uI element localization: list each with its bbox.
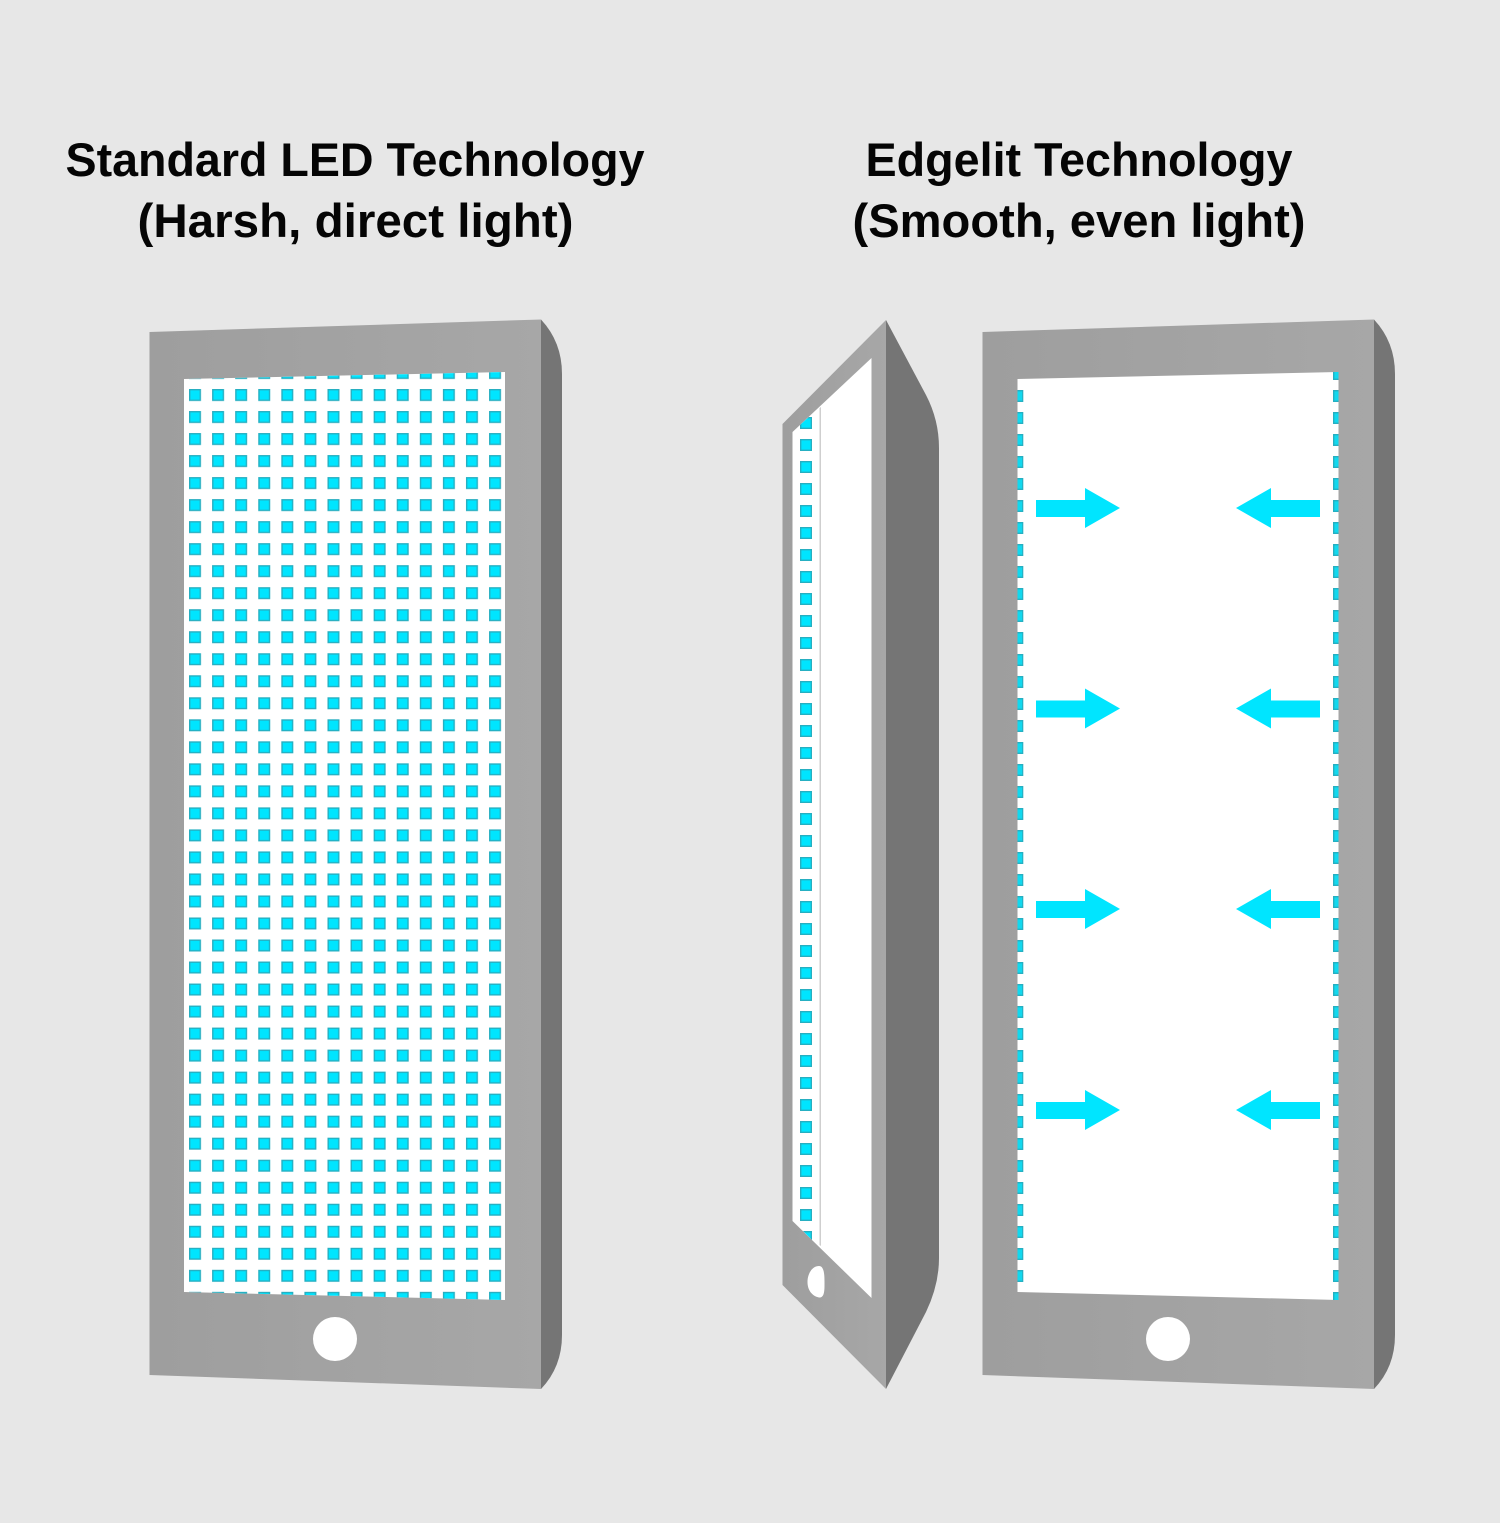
panel: edgelit side view	[782, 320, 939, 1389]
side view LED strip	[800, 414, 812, 1240]
device side edge	[541, 320, 562, 1389]
side view front frame	[782, 320, 886, 1389]
left edge LED strip	[1018, 390, 1023, 1285]
heading: edgelit technology: Edgelit Technology	[866, 133, 1292, 186]
panel: edgelit front view	[982, 320, 1395, 1389]
side view screen	[792, 358, 872, 1298]
arrows from left edge	[1036, 488, 1120, 1130]
screen	[1018, 372, 1338, 1300]
device front frame	[150, 320, 541, 1389]
heading: edgelit technology	[852, 133, 1306, 247]
heading: standard LED technology: Standard LED Technology	[66, 133, 644, 186]
device side edge	[1374, 320, 1395, 1389]
panel: standard LED device	[150, 320, 562, 1389]
side view button	[808, 1266, 825, 1298]
heading: standard LED technology: (Harsh, direct light)	[138, 194, 574, 247]
home button	[1146, 1317, 1190, 1361]
heading: standard LED technology	[66, 133, 644, 247]
side view back edge	[886, 320, 939, 1389]
screen	[184, 372, 505, 1300]
right edge LED strip	[1333, 372, 1338, 1300]
device front frame	[982, 320, 1374, 1389]
home button	[313, 1317, 357, 1361]
arrows from right edge	[1236, 488, 1320, 1130]
heading: edgelit technology: (Smooth, even light)	[852, 194, 1306, 247]
LED grid	[184, 372, 505, 1300]
side view light guide line	[820, 407, 821, 1246]
